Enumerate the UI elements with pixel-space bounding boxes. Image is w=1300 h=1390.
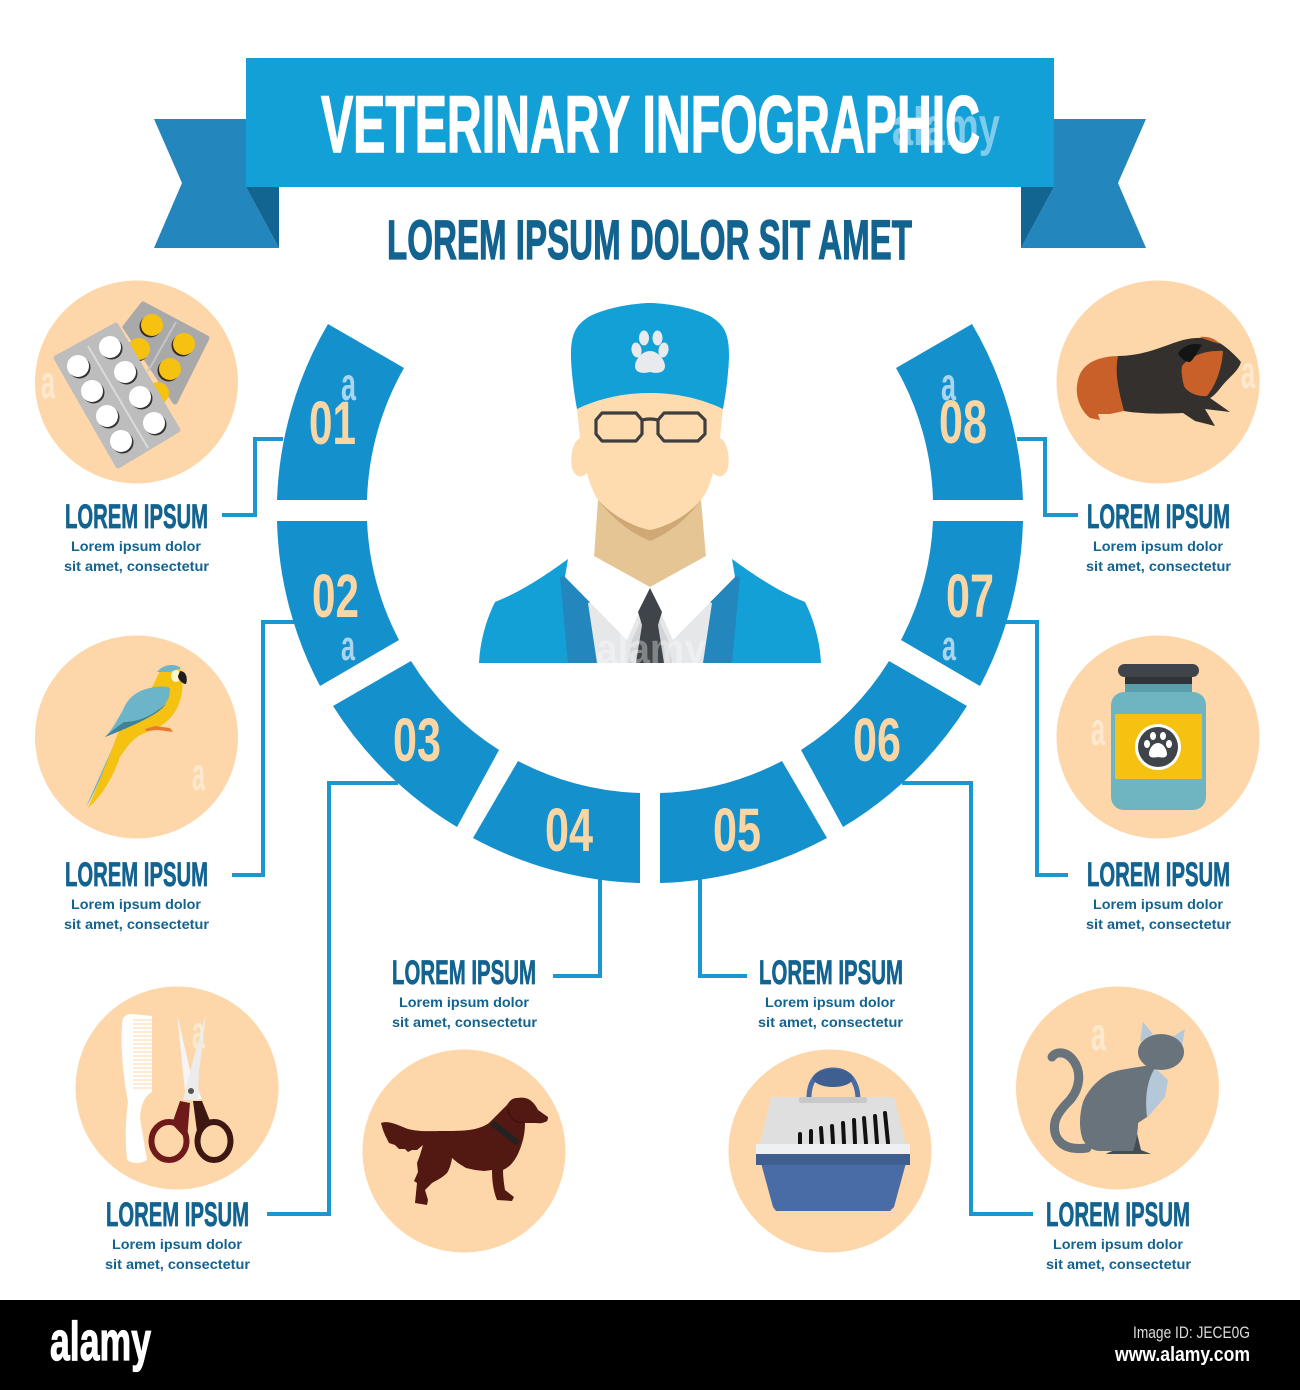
label 05: LOREM IPSUM — [759, 954, 903, 992]
label 05: sit amet, consectetur — [758, 1014, 904, 1030]
subtitle: LOREM IPSUM DOLOR SIT AMET — [387, 208, 912, 271]
label 01: sit amet, consectetur — [64, 558, 210, 574]
icon circle: cat — [1016, 986, 1219, 1190]
segment 05 — [660, 761, 827, 883]
footer url: www.alamy.com — [1114, 1344, 1250, 1366]
lapel watermark: alamy — [596, 625, 707, 672]
icon circle: parrot — [35, 636, 238, 838]
icon circle: guinea pig: a — [1241, 346, 1255, 398]
segment 01: a — [341, 358, 356, 410]
segment 08: 08 — [939, 388, 987, 456]
icon circle: comb and scissors: a — [192, 1006, 205, 1058]
glasses — [596, 413, 705, 441]
label 03: LOREM IPSUM — [106, 1196, 249, 1234]
label 06 — [1046, 1196, 1192, 1272]
icon circle: dog — [362, 1050, 566, 1252]
label 08: Lorem ipsum dolor — [1093, 538, 1224, 554]
label 08: sit amet, consectetur — [1086, 558, 1232, 574]
label 04: sit amet, consectetur — [392, 1014, 538, 1030]
label 04 — [392, 954, 538, 1030]
icon circle: pet carrier — [728, 1050, 932, 1252]
segment 02 — [277, 521, 399, 686]
footer bar — [0, 1300, 1300, 1390]
icon circle: comb and scissors — [76, 986, 278, 1190]
title banner — [154, 58, 1146, 248]
ring of numbered segments — [277, 324, 1023, 883]
head — [571, 393, 729, 530]
label 08 — [1086, 498, 1232, 574]
icon circle: blister pills: a — [41, 356, 55, 408]
label 06: sit amet, consectetur — [1046, 1256, 1192, 1272]
segment 03 — [333, 661, 499, 827]
title banner: alamy — [892, 97, 1000, 157]
segment 02: a — [341, 622, 355, 669]
label 01: Lorem ipsum dolor — [71, 538, 202, 554]
jacket — [479, 559, 821, 663]
footer image id: Image ID: JECE0G — [1133, 1323, 1250, 1342]
segment 04: 04 — [545, 796, 593, 864]
segment 01 — [277, 324, 404, 500]
label 07: sit amet, consectetur — [1086, 916, 1232, 932]
segment 08: a — [941, 358, 956, 410]
label 04: LOREM IPSUM — [392, 954, 536, 992]
icon circle: guinea pig — [1056, 280, 1260, 484]
label 03 — [105, 1196, 251, 1272]
icon circle: parrot: a — [192, 748, 205, 800]
collar — [565, 556, 735, 640]
segment 04 — [473, 761, 640, 883]
tie — [636, 588, 664, 663]
paw emblem — [630, 330, 670, 373]
label 06: LOREM IPSUM — [1046, 1196, 1190, 1234]
segment 03: 03 — [393, 706, 441, 774]
label 07: Lorem ipsum dolor — [1093, 896, 1224, 912]
label 02: Lorem ipsum dolor — [71, 896, 202, 912]
label 01 — [64, 498, 210, 574]
label 01: LOREM IPSUM — [65, 498, 208, 536]
segment 07 — [901, 521, 1023, 686]
icon circle: medicine jar: a — [1091, 703, 1105, 755]
veterinarian figure — [479, 303, 821, 672]
label 04: Lorem ipsum dolor — [399, 994, 530, 1010]
segment 05: 05 — [713, 796, 761, 864]
label 03: Lorem ipsum dolor — [112, 1236, 243, 1252]
label 03: sit amet, consectetur — [105, 1256, 251, 1272]
footer logo: alamy — [50, 1310, 151, 1372]
segment 06 — [801, 661, 967, 827]
icon circle: blister pills — [35, 280, 238, 484]
label 06: Lorem ipsum dolor — [1053, 1236, 1184, 1252]
segment 07: a — [942, 622, 956, 669]
icon circle: medicine jar — [1056, 636, 1260, 838]
label 02: LOREM IPSUM — [65, 856, 208, 894]
label 02 — [64, 856, 210, 932]
segment 06: 06 — [853, 706, 901, 774]
segment 01: 01 — [309, 389, 356, 457]
segment 08 — [896, 324, 1023, 500]
neck — [594, 500, 706, 590]
cap — [571, 303, 729, 409]
label 05 — [758, 954, 904, 1030]
segment 07: 07 — [946, 562, 994, 630]
icon circle: cat: a — [1091, 1008, 1106, 1060]
segment 02: 02 — [312, 562, 359, 630]
connectors — [222, 439, 1078, 1214]
label 07 — [1086, 856, 1232, 932]
label 05: Lorem ipsum dolor — [765, 994, 896, 1010]
label 02: sit amet, consectetur — [64, 916, 210, 932]
